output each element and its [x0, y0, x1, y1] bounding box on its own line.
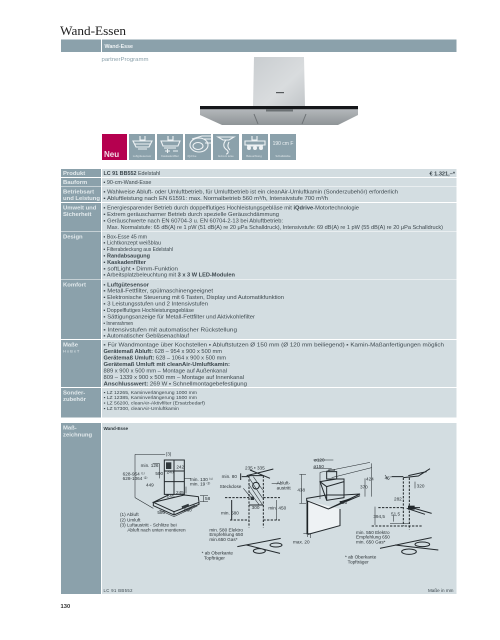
row: Design: ▪ Kaskadenfilter [104, 260, 147, 266]
drawing: hood on wall: ø120 [314, 457, 325, 462]
row: Sonderzubehör [61, 388, 456, 418]
icon: Schallstärke: Schallstärke [275, 154, 291, 158]
drawing: hood perspective: (3) [166, 452, 172, 457]
drawing: side view with socket: min. 580 Elektro [209, 527, 243, 532]
row: Maße [61, 340, 456, 388]
row: Komfort: ▪ Luftgütesensor [104, 282, 150, 288]
row: Maße: Maße [63, 342, 79, 348]
row: Betriebsart und Leistung: Betriebsart [63, 190, 94, 196]
row: Sonderzubehör: ▪ LZ 12265, Kaminverlängerung 1000 mm [104, 390, 197, 395]
product photo: range hood [200, 57, 358, 125]
drawing: hood on wall [293, 457, 374, 544]
drawing: hood perspective: 580 [157, 510, 166, 515]
row: Komfort: ▪ Metall-Fettfilter, spülmaschinengeeignet [104, 289, 214, 295]
drawing: side section: min. 650 Gas* [356, 539, 386, 544]
drawing: side view with socket: Topfträger [204, 556, 225, 561]
icon: Kaskadenfilter: Kaskadenfilter [161, 154, 179, 158]
drawing: side view with socket: min. 80 [222, 474, 237, 479]
row: Umwelt und Sicherheit: Max. Normalstufe: 65 dB(A) re 1 pW (51 dB(A) re 20 μPa Schalldruck), Intensivstufe: 69 dB(A) re 1 pW (55 dB(A) re 20 μPa Schalldruck) [107, 225, 443, 231]
drawing: side section: 45° [385, 475, 392, 480]
row: Maße: 809 – 1339 x 900 x 500 mm – Montage auf Innenkanal [104, 375, 244, 381]
row: Umwelt und Sicherheit: ▪ Extrem geräuscharmer Betrieb durch spezielle Geräuschdämmung [104, 212, 279, 218]
icon: Neu badge [102, 134, 127, 160]
row: Umwelt und Sicherheit: ▪ Geräuschwerte nach EN 60704-3 u. EN 60704-2-13 bei Abluftbetrieb: [104, 218, 283, 224]
drawing: hood perspective: Abluft nach unten montieren [127, 527, 186, 532]
row: Maße: ▪ Für Wandmontage über Kochstellen ▪ Abluftstutzen Ø 150 mm (Ø 120 mm beiliegend) ▪ Kamin-Maßanfertigungen möglich [104, 343, 444, 349]
drawing: side view with socket: 300 [252, 505, 260, 510]
unit note: Maße in mm [428, 588, 454, 593]
drawing: hood perspective: (2) Umluft [120, 517, 141, 522]
model number: LC 91 BB552 [104, 588, 133, 593]
row: Sonderzubehör: ▪ LZ 12385, Kaminverlängerung 1500 mm [104, 395, 197, 400]
drawing: hood on wall: 438 [297, 488, 306, 493]
drawing: hood perspective: 560 [184, 508, 192, 513]
drawing: hood on wall: ø150 [313, 464, 324, 469]
row: Design: ▪ Box-Esse 45 mm [104, 234, 147, 240]
drawing: hood on wall: 555 [339, 500, 348, 505]
icon: iQdrive [185, 134, 211, 160]
drawing: hood on wall: 370 [360, 484, 368, 489]
row: Produkt: Produkt [63, 171, 85, 177]
row: Umwelt und Sicherheit: Sicherheit [63, 212, 92, 218]
icon: Beleuchtung: Beleuchtung [246, 154, 262, 158]
drawing: side section: 394,5 [373, 514, 385, 519]
row: Sonderzubehör: ▪ LZ 56200, cleanAir-Aktivfilter (Ersatzbedarf) [104, 401, 206, 406]
icon: Luftgütesensor: Luftgütesensor [133, 154, 151, 158]
row: Maße: Gerätemaß Umluft mit cleanAir-Umluftkamin: [104, 362, 230, 368]
panel: Maßzeichnung: Maß- [63, 426, 77, 432]
drawing: hood perspective: min. 130 ⁽¹⁾ [190, 477, 213, 482]
row: Komfort [61, 280, 456, 340]
icon: Neu badge: Neu [104, 150, 119, 159]
row: Design: ▪ Lichtkonzept weißblau [104, 241, 161, 247]
drawing: hood perspective: 247 [167, 470, 175, 475]
partner programme label: partnerProgramm [102, 57, 149, 63]
row: Design: ▪ Filterabdeckung aus Edelstahl [104, 247, 173, 253]
header bar: Wand-Esse [104, 44, 133, 50]
row: Maße: Gerätemaß Umluft: 628 – 1064 x 900 x 500 mm [104, 356, 227, 362]
drawing: hood perspective: 245 [176, 490, 184, 495]
drawing: side section: Empfehlung 650 [356, 534, 390, 539]
icon: Beleuchtung [242, 134, 268, 160]
drawing: hood perspective [120, 452, 213, 532]
title: Wand-Essen [60, 24, 127, 38]
drawing: hood perspective: 242 [176, 464, 185, 469]
drawing: side view with socket: Empfehlung 650 [209, 532, 244, 537]
row: Komfort: ▪ Doppelflutiges Hochleistungsgebläse [104, 308, 194, 314]
row: Komfort: ▪ Automatischer Gebläsenachlauf [104, 334, 190, 340]
drawing: side section: 51,5 [391, 511, 400, 516]
icon: iQdrive: iQdrive [188, 154, 197, 158]
row: Bauform: ▪ 90-cm-Wand-Esse [104, 180, 151, 186]
row: Sonderzubehör: Sonder- [63, 390, 85, 396]
row: Maße: H x B x T [63, 348, 80, 354]
row: Sonderzubehör: zubehör [63, 397, 87, 403]
drawing: side view with socket: min. 580 [221, 511, 239, 516]
row: Umwelt und Sicherheit [61, 203, 456, 232]
row: Design: ▪ softLight ▪ Dimm-Funktion [104, 266, 178, 272]
icon: Extrem leise: Extrem leise [218, 154, 234, 158]
row: Produkt: € 1.321,–* [429, 171, 456, 177]
drawing: hood perspective: min. 126 [141, 463, 159, 468]
row: Betriebsart und Leistung: ▪ Wahlweise Abluft- oder Umluftbetrieb, für Umluftbetrieb ist ein cleanAir-Umluftkamin (Sonderzubehör) erforderlich [104, 190, 398, 196]
row: Design: ▪ Arbeitsplatzbeleuchtung mit 3 x 3 W LED-Modulen [104, 273, 235, 279]
row: Komfort: ▪ 3 Leistungsstufen und 2 Intensivstufen [104, 302, 208, 308]
row: Bauform [61, 178, 456, 186]
row: Produkt [61, 169, 456, 177]
row: Sonderzubehör: ▪ LZ 57300, cleanAir-Umluftkamin [104, 406, 180, 411]
row: Komfort: Komfort [63, 282, 86, 288]
row: Betriebsart und Leistung: und Leistung [63, 196, 100, 202]
row: Produkt: LC 91 BB552 Edelstahl [104, 171, 160, 177]
row: Maße: Gerätemaß Abluft: 628 – 954 x 900 x 500 mm [104, 349, 223, 355]
row: Komfort: ▪ Intensivstufen mit automatischer Rückstellung [104, 327, 237, 333]
drawing: hood on wall: 424 [366, 477, 374, 482]
drawing: hood perspective: 449 [146, 483, 154, 488]
drawing: hood on wall: max. 20 [293, 539, 310, 544]
row: Betriebsart und Leistung: ▪ Abluftleistung nach EN 61591: max. Normalbetrieb 560 m³/h, Intensivstufe 700 m³/h [104, 196, 328, 202]
drawing: side section: * ab Oberkante [345, 554, 377, 559]
drawing: hood perspective: 500 [155, 471, 164, 476]
icon: Schallstärke [270, 134, 296, 160]
row: Maße: Anschlusswert: 269 W ▪ Schnellmontagebefestigung [104, 382, 247, 388]
row: Maße: 889 x 900 x 500 mm – Montage auf Außenkanal [104, 368, 227, 374]
row: Umwelt und Sicherheit: ▪ Energiesparender Betrieb durch doppelflutiges Hochleistungsgebläse mit iQdrive-Motortechnologie [104, 206, 359, 212]
header bar [61, 40, 456, 52]
drawing: hood perspective: 628-1064 ⁽²⁾ [123, 476, 147, 481]
panel: Maßzeichnung [61, 423, 456, 594]
row: Betriebsart und Leistung [61, 187, 456, 202]
drawing: hood perspective: (1) Abluft [120, 512, 139, 517]
drawing: hood perspective: 628-954 ⁽¹⁾ [123, 472, 145, 477]
row: Design: Design [63, 234, 83, 240]
icon: Kaskadenfilter [157, 134, 183, 160]
panel: Maßzeichnung: zeichnung [63, 432, 93, 438]
drawing: side section: Topfträger [348, 559, 369, 564]
drawing: hood perspective: (3) Luftaustritt - Schlitze bei [120, 522, 177, 527]
drawing: hood perspective: min. 19 ⁽²⁾ [190, 481, 210, 486]
row: Design: ▪ Randabsaugung [104, 254, 150, 260]
drawing: side view with socket: min. 450 [268, 506, 287, 511]
drawing: side view with socket: Abluft- [277, 481, 291, 486]
drawing: side section: min. 550 Elektro [356, 530, 390, 535]
drawing: side section: 320 [417, 483, 425, 488]
drawing: hood perspective: 245 [167, 494, 175, 499]
drawing: side view with socket: min.650 Gas* [209, 537, 238, 542]
icon: Extrem leise [213, 134, 239, 160]
drawing: side section [345, 469, 438, 564]
drawing: side view with socket: * ab Oberkante [202, 551, 233, 556]
drawing: side view with socket: 235 • 335 [245, 466, 265, 471]
drawing: side section: 282 [394, 497, 402, 502]
drawing: side view with socket: Steckdose [220, 484, 242, 489]
drawing: side view with socket [202, 466, 291, 561]
row: Komfort: ▪ Sättigungsanzeige für Metall-Fettfilter und Aktivkohlefilter [104, 314, 255, 320]
drawing: side view with socket: austritt [277, 486, 291, 491]
icon: Schallstärke: 190 cm F [273, 141, 293, 147]
row: Bauform: Bauform [63, 180, 87, 186]
row: Komfort: ▪ Innenrahmen [104, 321, 133, 327]
drawing: hood perspective: 58 [205, 496, 211, 501]
row: Komfort: ▪ Elektronische Steuerung mit 6 Tasten, Display und Automatikfunktion [104, 295, 284, 301]
panel: Maßzeichnung: Wand-Esse [104, 426, 129, 431]
row: Design [61, 232, 456, 280]
row: Umwelt und Sicherheit: Umwelt und [63, 206, 97, 212]
icon: Luftgütesensor [129, 134, 155, 160]
page number: 130 [60, 604, 70, 610]
